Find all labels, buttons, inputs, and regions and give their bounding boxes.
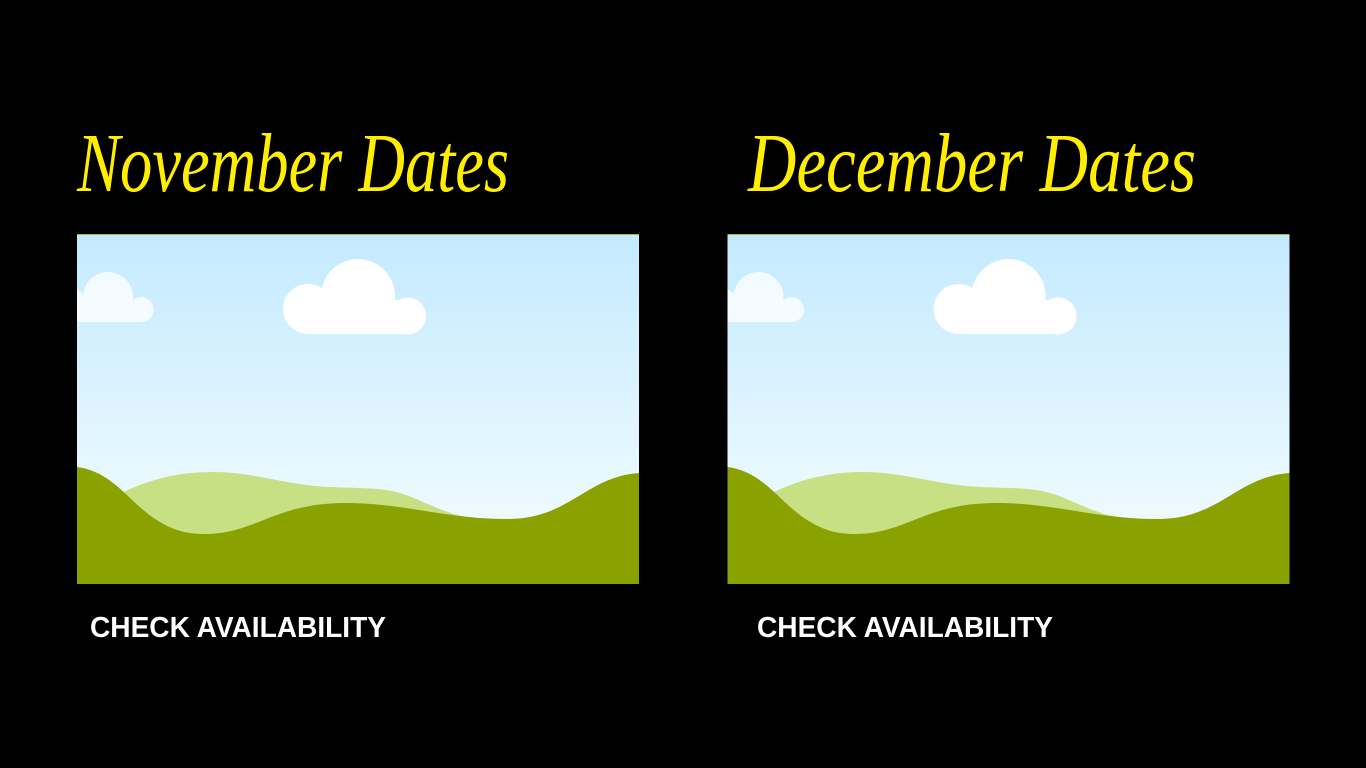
small cloud [728,272,804,322]
label: check availability December: CHECK AVAILABILITY [757,612,1053,644]
label: check availability November: CHECK AVAILABILITY [90,612,386,644]
sky [728,234,1290,534]
large cloud [283,259,426,334]
large cloud [934,259,1076,334]
heading: December Dates: December Dates [747,117,1196,210]
panel: December landscape [704,234,1290,584]
top edge line [728,234,1290,235]
dark green hill [77,467,639,584]
light green hill [774,472,1116,534]
small cloud [77,272,154,322]
panel: November landscape [53,234,639,584]
dark green hill [728,467,1290,584]
sky [77,234,639,534]
top edge line [77,234,639,235]
light green hill [124,472,466,534]
heading: November Dates: November Dates [76,117,509,210]
